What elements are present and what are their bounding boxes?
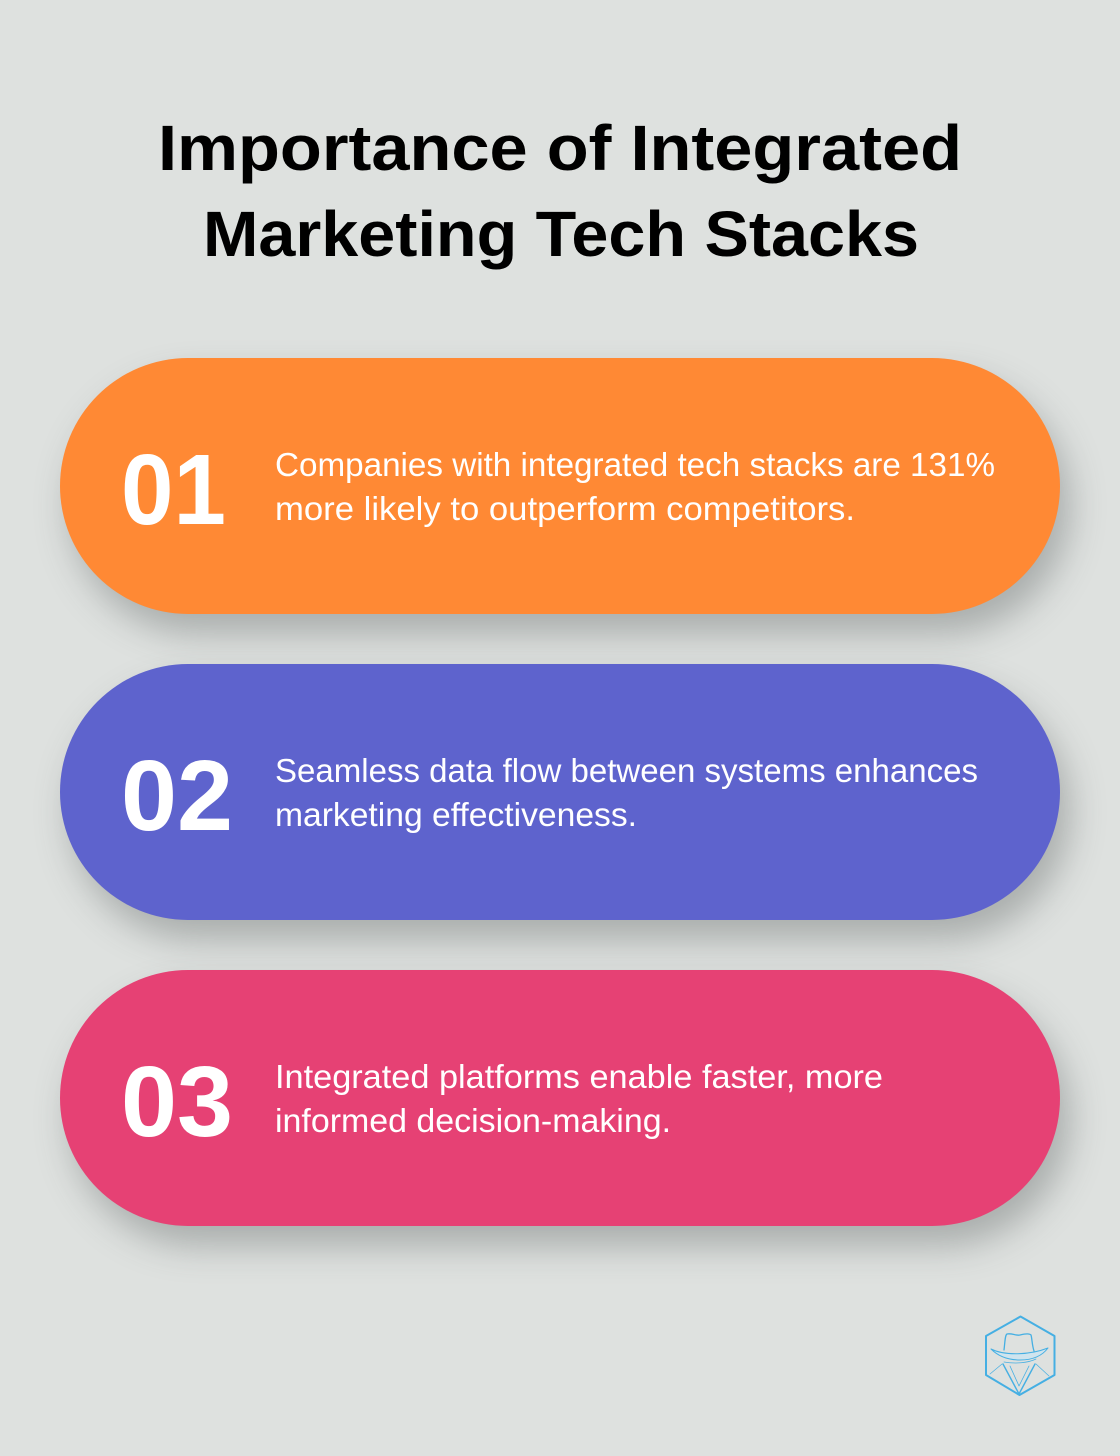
panel: step 02 indigo pill	[60, 664, 1060, 920]
step 03 text	[275, 1058, 883, 1139]
step 02 text	[275, 752, 978, 833]
step 02 number: 02	[121, 740, 233, 852]
step 01 text: Companies with integrated tech stacks are 131%	[275, 446, 995, 483]
step 03 text: informed decision-making.	[275, 1102, 671, 1139]
step 03 text: Integrated platforms enable faster, more	[275, 1058, 883, 1095]
icon: spy logo in hexagon	[986, 1316, 1054, 1395]
step 02 text: Seamless data flow between systems enhances	[275, 752, 978, 789]
step 02 text: marketing effectiveness.	[275, 796, 637, 833]
step 01 number: 01	[121, 434, 226, 546]
title	[158, 112, 962, 270]
step 03 number: 03	[121, 1046, 233, 1158]
panel: step 01 orange pill	[60, 358, 1060, 614]
step 01 text	[275, 446, 995, 527]
title: Importance of Integrated	[158, 112, 962, 184]
step 01 text: more likely to outperform competitors.	[275, 490, 855, 527]
panel: step 03 pink pill	[60, 970, 1060, 1226]
title: Marketing Tech Stacks	[203, 198, 919, 270]
